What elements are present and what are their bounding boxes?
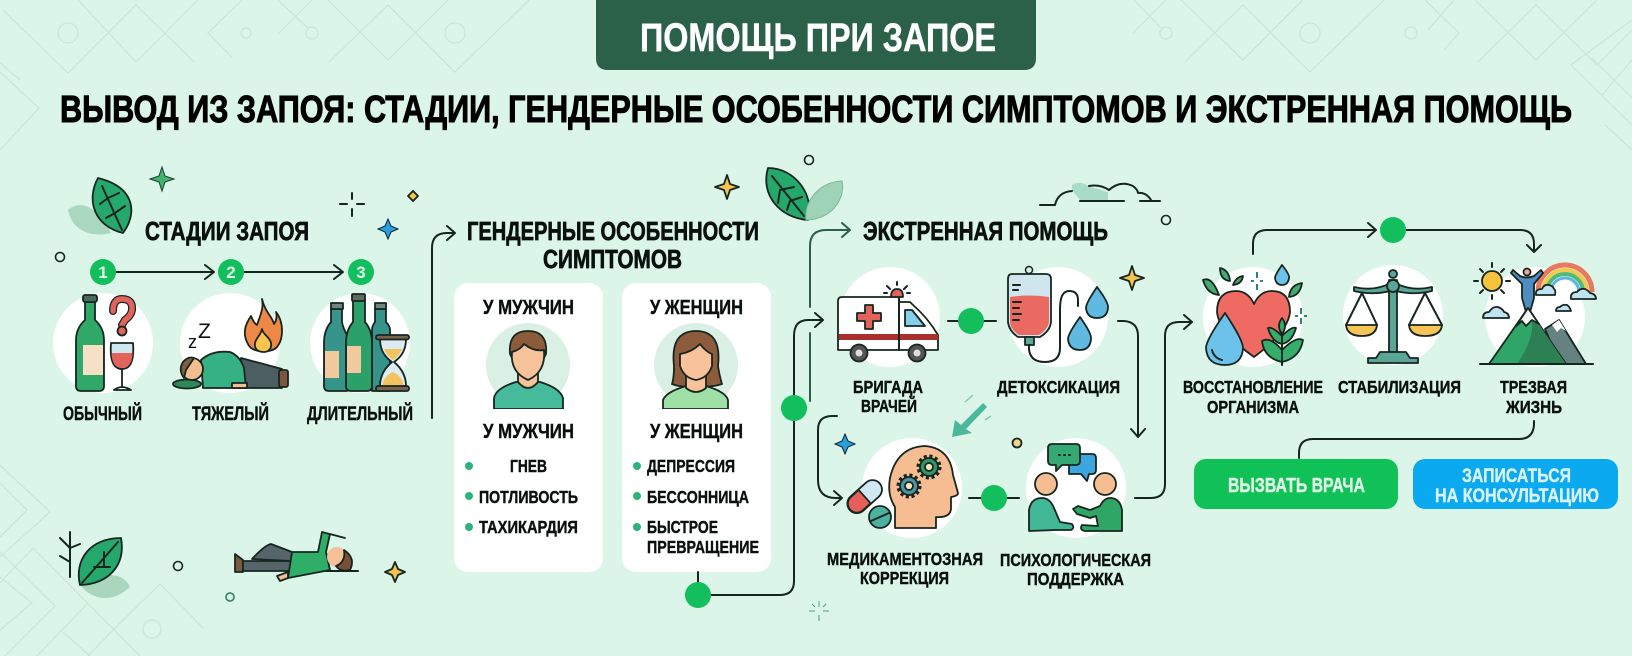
label: doctors team: БРИГАДА (853, 377, 923, 397)
card: men (454, 283, 603, 572)
label: detox: ДЕТОКСИКАЦИЯ (997, 377, 1120, 397)
heading: emergency: ЭКСТРЕННАЯ ПОМОЩЬ (863, 216, 1108, 246)
connector to buttons (1299, 421, 1534, 458)
button: book consultation (1413, 459, 1618, 509)
accent arrow (952, 395, 991, 437)
step: ambulance (838, 267, 940, 416)
stage 2: Z (198, 320, 211, 343)
card: men: У МУЖЧИН (483, 421, 574, 443)
step: medication: КОРРЕКЦИЯ (860, 568, 949, 588)
card: women: У ЖЕНЩИН (650, 297, 743, 319)
label: recovery: ВОССТАНОВЛЕНИЕ (1183, 377, 1323, 397)
card: women (622, 283, 771, 572)
step: psychological support (1000, 438, 1151, 589)
heading: stages: СТАДИИ ЗАПОЯ (145, 216, 309, 246)
step: sober life: ЖИЗНЬ (1505, 397, 1562, 417)
card: women: У ЖЕНЩИН (650, 421, 743, 443)
label: prolonged: ДЛИТЕЛЬНЫЙ (307, 403, 413, 425)
step: sober life (1474, 263, 1596, 417)
label: stabilization: СТАБИЛИЗАЦИЯ (1338, 377, 1461, 397)
stage 3 (307, 259, 413, 425)
button: call doctor (1194, 459, 1398, 509)
card: men: ПОТЛИВОСТЬ (479, 487, 578, 507)
heading: gender: ГЕНДЕРНЫЕ ОСОБЕННОСТИ (467, 216, 759, 246)
label: severe: ТЯЖЕЛЫЙ (192, 403, 269, 425)
card: women: БЕССОННИЦА (647, 487, 749, 507)
panel: gender differences (454, 216, 771, 572)
step: detoxification (997, 266, 1120, 397)
card: men: ТАХИКАРДИЯ (479, 517, 578, 537)
label: normal: ОБЫЧНЫЙ (63, 403, 142, 425)
arrow: stages to gender section (432, 226, 455, 418)
decorative icons (56, 156, 1170, 621)
stage 3: 3 (356, 263, 366, 282)
bracket arrow (818, 416, 842, 505)
step: psychological support: ПОДДЕРЖКА (1027, 569, 1124, 589)
label: psychological support: ПСИХОЛОГИЧЕСКАЯ (1000, 550, 1151, 570)
arrow: emergency to recovery (1135, 315, 1192, 498)
connector: gender to emergency (685, 223, 850, 608)
top banner: ПОМОЩЬ ПРИ ЗАПОЕ (640, 16, 996, 60)
card: women: ДЕПРЕССИЯ (647, 456, 735, 476)
panel: stages of binge (53, 216, 413, 425)
card: women: ПРЕВРАЩЕНИЕ (647, 537, 759, 557)
lying person illustration (235, 532, 358, 581)
stage 1: 1 (98, 263, 108, 282)
stage 2: z (188, 332, 197, 352)
connector node (948, 308, 996, 334)
step: medication (827, 438, 983, 588)
card: women: БЫСТРОЕ (647, 517, 718, 537)
step: body recovery (1183, 265, 1323, 417)
button: book consultation: ЗАПИСАТЬСЯ (1462, 465, 1571, 487)
stage 2 (173, 259, 288, 425)
label: medication correction: МЕДИКАМЕНТОЗНАЯ (827, 549, 983, 569)
stage 2: 2 (226, 263, 236, 282)
card: men: У МУЖЧИН (483, 297, 574, 319)
step: body recovery: ОРГАНИЗМА (1207, 397, 1299, 417)
step: ambulance: ВРАЧЕЙ (861, 395, 917, 416)
arrow: detox to next step (1118, 321, 1145, 437)
stage flow arrows (116, 265, 343, 279)
stage 1 (53, 259, 153, 425)
panel: emergency help (818, 216, 1151, 589)
connector node (969, 485, 1019, 511)
panel: recovery path (1183, 217, 1618, 509)
card: men: ГНЕВ (510, 456, 547, 476)
button: book consultation: НА КОНСУЛЬТАЦИЮ (1435, 485, 1599, 507)
heading: gender (467, 216, 759, 274)
button: call doctor: ВЫЗВАТЬ ВРАЧА (1228, 474, 1365, 497)
step: stabilization (1338, 265, 1461, 397)
label: sober life: ТРЕЗВАЯ (1500, 377, 1567, 397)
arrow with node: recovery to sober life (1253, 217, 1541, 254)
heading: gender: СИМПТОМОВ (543, 244, 682, 274)
top banner (596, 0, 1036, 70)
